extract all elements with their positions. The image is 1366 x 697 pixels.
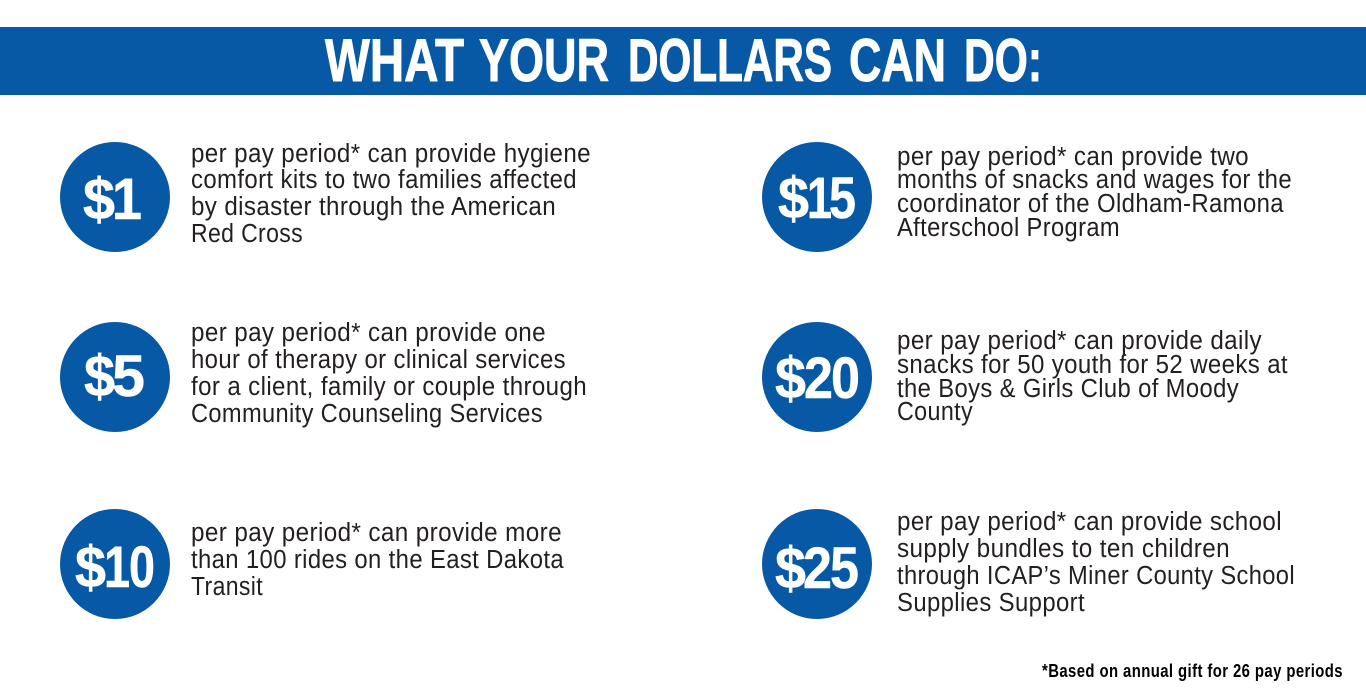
panel: $10 item: 0 (129, 535, 155, 600)
panel: $10 item: Transit (191, 573, 263, 601)
panel: $25 item (762, 508, 1295, 619)
panel: $25 item: per pay period* can provide school (897, 508, 1282, 536)
panel: $10 item: than 100 rides on the East Dakota (191, 546, 564, 574)
panel: $5 item (60, 319, 587, 432)
panel: $1 item: comfort kits to two families affected (191, 166, 577, 194)
panel: $5 item: 5 (112, 344, 145, 409)
title: YOUR (479, 27, 609, 94)
title: DO: (964, 27, 1042, 94)
panel: $25 item: supply bundles to ten children (897, 535, 1230, 563)
title: DOLLARS (628, 27, 832, 94)
panel: $5 item: per pay period* can provide one (191, 319, 546, 347)
panel: $15 item: coordinator of the Oldham-Ramona (897, 190, 1284, 218)
panel: $15 item: 1 (807, 166, 832, 231)
panel: $15 item: months of snacks and wages for the (897, 166, 1292, 194)
panel: $15 item (762, 142, 1292, 252)
panel: $1 item: 1 (112, 167, 142, 232)
panel: $5 item: Community Counseling Services (191, 400, 543, 428)
title banner (0, 27, 1366, 95)
panel: $10 item: 1 (104, 535, 130, 600)
panel: $15 item: 5 (829, 166, 856, 231)
panel: $15 item: per pay period* can provide two (897, 143, 1249, 171)
panel: $25 item: 5 (830, 536, 859, 601)
panel: $1 item: Red Cross (191, 220, 303, 248)
panel: $20 item (762, 322, 1288, 432)
panel: $20 item: 0 (831, 346, 860, 411)
panel: $10 item: $ (75, 535, 106, 600)
panel: $25 item: $ (775, 536, 806, 601)
panel: $25 item: 2 (803, 536, 832, 601)
panel: $1 item: by disaster through the American (191, 193, 556, 221)
panel: $10 item (60, 509, 564, 619)
panel: $10 item: per pay period* can provide more (191, 519, 562, 547)
title: CAN (849, 27, 946, 94)
panel: $5 item: $ (84, 344, 115, 409)
panel: $20 item: the Boys & Girls Club of Moody (897, 375, 1239, 403)
panel: $20 item: $ (775, 346, 806, 411)
panel: $20 item: per pay period* can provide daily (897, 327, 1262, 355)
panel: $25 item: Supplies Support (897, 589, 1085, 617)
panel: $1 item (60, 140, 591, 252)
panel: $15 item: Afterschool Program (897, 214, 1120, 242)
title: WHAT (325, 27, 464, 94)
panel: $15 item: $ (778, 166, 809, 231)
panel: $25 item: through ICAP’s Miner County School (897, 562, 1295, 590)
panel: $20 item: 2 (804, 346, 833, 411)
panel: $20 item: snacks for 50 youth for 52 weeks at (897, 351, 1288, 379)
panel: $20 item: County (897, 398, 973, 426)
panel: $5 item: for a client, family or couple through (191, 373, 587, 401)
panel: $1 item: $ (83, 167, 115, 232)
panel: $5 item: hour of therapy or clinical services (191, 346, 566, 374)
panel: $1 item: per pay period* can provide hygiene (191, 140, 591, 168)
